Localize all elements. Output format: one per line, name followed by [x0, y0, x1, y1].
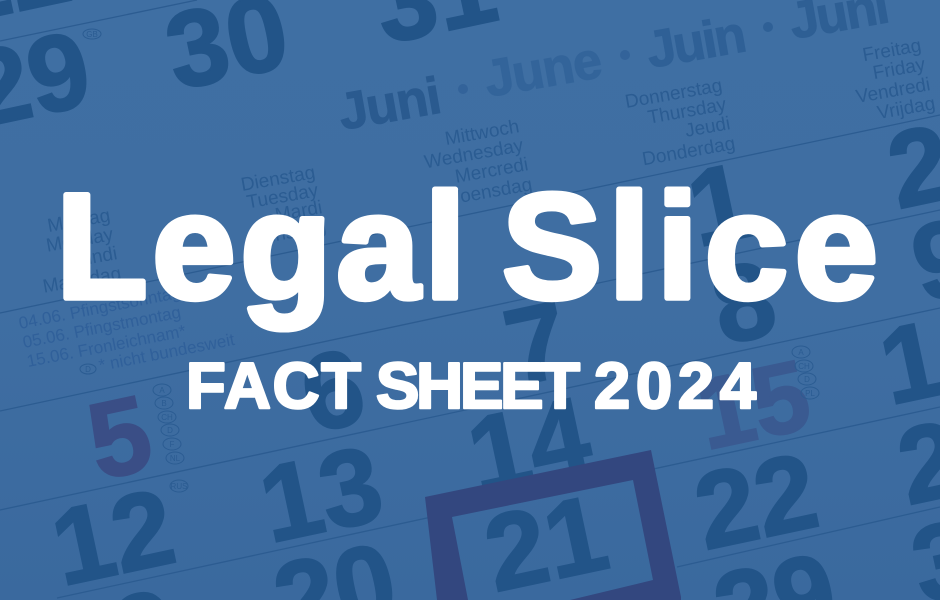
country code badges: NL: [170, 454, 181, 463]
weekday labels: Vrijdag: [876, 93, 937, 124]
month heading: Juni June Juin Juni: June: [480, 31, 606, 109]
month heading: Juni June Juin Juni: Juni: [334, 67, 446, 142]
calendar date numerals: 7: [495, 278, 579, 408]
weekday labels: Dinsdag: [256, 216, 328, 249]
country code badges: GB: [86, 30, 98, 39]
country code badges: CH: [798, 362, 810, 371]
month heading: Juni June Juin Juni: Juin: [642, 5, 751, 80]
weekday labels: Friday: [871, 54, 927, 84]
weekday labels: Mercredi: [453, 154, 530, 188]
weekday labels: Woensdag: [441, 174, 534, 211]
country code badges: A: [798, 348, 804, 357]
holiday notes: [17, 283, 236, 375]
country code badges: [83, 29, 819, 492]
weekday labels: Wednesday: [423, 135, 525, 173]
holiday notes: * nicht bundesweit: [97, 330, 236, 375]
holiday notes: 05.06. Pfingstmontag: [21, 303, 182, 352]
country code badges: D: [804, 375, 810, 384]
country code badges: F: [170, 440, 175, 449]
weekday labels: Montag: [46, 205, 112, 237]
calendar date numerals: 13: [250, 422, 392, 565]
weekday labels: Tuesday: [245, 180, 320, 213]
weekday labels: Donderdag: [641, 133, 737, 170]
calendar date numerals: 1: [678, 139, 762, 269]
subtitle: SHEET: [376, 349, 580, 422]
weekday labels: [41, 35, 937, 298]
title: [56, 162, 878, 330]
weekday labels: Dienstag: [239, 162, 317, 196]
calendar date numerals: 8: [702, 237, 786, 367]
holiday numeral 15: 15: [687, 339, 819, 472]
weekday labels: Donnerstag: [623, 75, 724, 113]
month heading: Juni June Juin Juni: [334, 0, 894, 142]
subtitle: [186, 349, 756, 422]
holiday notes: 04.06. Pfingstsonntag: [17, 283, 182, 333]
country code badges: D: [167, 426, 173, 435]
country code badges: A: [159, 386, 165, 395]
calendar date numerals: 22: [685, 429, 827, 572]
weekday labels: Mittwoch: [443, 116, 521, 150]
title: Slice: [502, 162, 878, 330]
weekday labels: Maandag: [41, 263, 123, 298]
holiday notes: D: [85, 365, 91, 374]
country code badges: B: [161, 399, 167, 408]
weekday labels: Freitag: [861, 35, 923, 66]
country code badges: RUS: [171, 482, 187, 491]
weekday labels: Thursday: [646, 94, 728, 129]
country code badges: PL: [805, 389, 815, 398]
subtitle: 2024: [594, 349, 756, 422]
title: Legal: [56, 162, 466, 330]
date marker frame: [425, 450, 681, 600]
weekday labels: Lundi: [69, 243, 119, 272]
weekday labels: Vendredi: [854, 74, 932, 108]
subtitle: FACT: [186, 349, 361, 422]
holiday notes: 15.06. Fronleichnam*: [25, 321, 188, 371]
weekday labels: Jeudi: [683, 113, 732, 142]
holiday numeral 5: 5: [78, 372, 162, 502]
weekday labels: Monday: [45, 224, 115, 257]
weekday labels: Mardi: [273, 197, 324, 226]
calendar date numerals: 6: [291, 325, 375, 455]
calendar date numerals: 14: [458, 373, 600, 516]
country code badges: CH: [161, 413, 173, 422]
